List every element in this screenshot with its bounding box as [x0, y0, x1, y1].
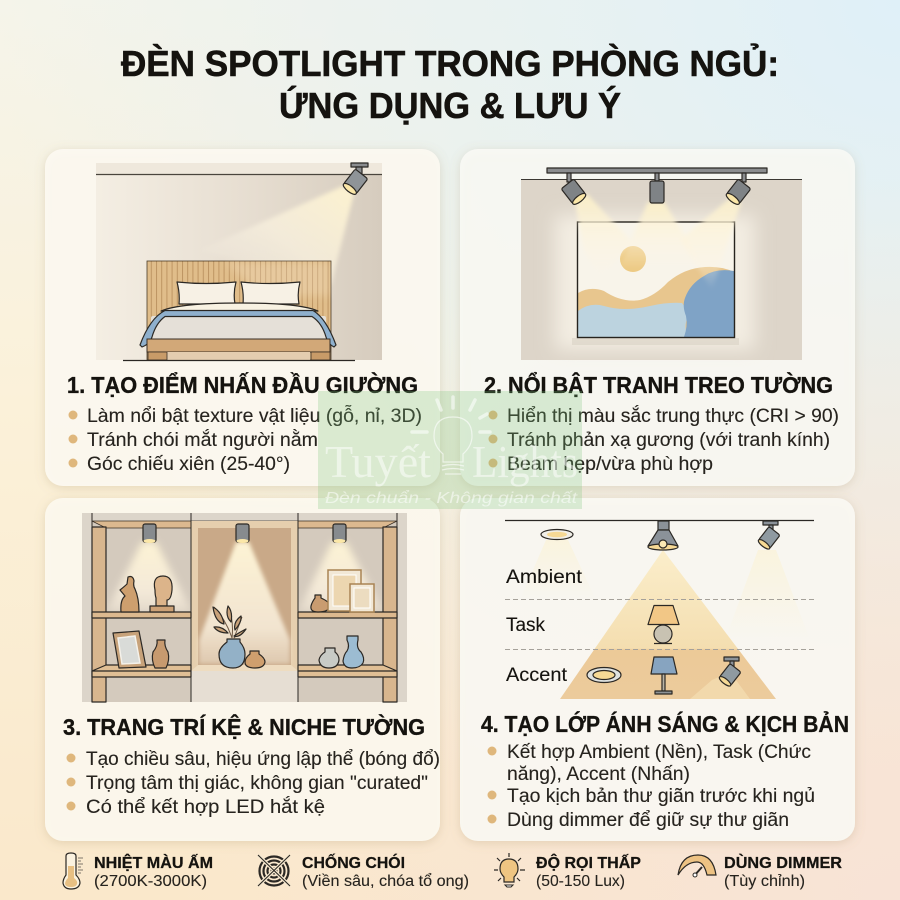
watermark: Tuyet Lights: Đèn chuẩn - Không gian chất	[325, 489, 578, 507]
artwork	[578, 222, 734, 338]
panel: light layers and scenes	[460, 498, 855, 841]
illustration: artwork with three spotlights	[521, 168, 802, 360]
icon: downlights	[143, 524, 346, 543]
bullet list: Tránh chói mắt người nằm	[87, 429, 318, 451]
label: task: Task	[506, 615, 545, 636]
bullet list: Kết hợp Ambient (Nền), Task (Chức	[507, 742, 811, 763]
icon: pendant light	[648, 521, 678, 550]
icon: accent spot	[718, 657, 741, 688]
icon: ceiling downlight	[541, 530, 573, 540]
bullet list: Beam hẹp/vừa phù hợp	[507, 454, 713, 475]
label: accent: Accent	[506, 665, 568, 686]
bullet list: Làm nổi bật texture vật liệu (gỗ, nỉ, 3D)	[87, 405, 422, 427]
title: ỨNG DỤNG & LƯU Ý	[279, 84, 621, 126]
bullet list	[488, 742, 815, 831]
bullet list: Có thể kết hợp LED hắt kệ	[86, 796, 325, 818]
footer: dimmer: DÙNG DIMMER	[724, 854, 842, 872]
right shelf decor	[311, 570, 374, 668]
icon: dimmer gauge	[678, 855, 716, 877]
icon: light bulb	[494, 853, 525, 887]
footer: low illuminance: (50-150 Lux)	[536, 873, 625, 890]
panel: headboard accent	[45, 149, 440, 486]
left shelf decor	[113, 576, 174, 668]
watermark: Tuyet Lights	[318, 391, 582, 509]
heading: 2. NỔI BẬT TRANH TREO TƯỜNG	[484, 371, 833, 398]
icon: track spot	[757, 521, 780, 551]
panel: shelves and niches	[45, 498, 440, 841]
centre niche decor	[213, 606, 265, 668]
footer: warm colour temperature	[63, 853, 213, 890]
heading: 4. TẠO LỚP ÁNH SÁNG & KỊCH BẢN	[481, 709, 849, 737]
icon: honeycomb crossed	[258, 855, 290, 886]
footer: anti-glare: (Viền sâu, chóa tổ ong)	[302, 873, 469, 890]
icon: three track spotlights	[561, 173, 751, 206]
diagram: ambient, task, accent layers	[505, 520, 814, 699]
illustration: shelving with downlights	[82, 513, 407, 702]
bullet list: năng), Accent (Nhấn)	[507, 764, 690, 785]
footer: anti-glare	[258, 854, 469, 890]
icon: track spotlight	[342, 163, 368, 196]
bullet list	[68, 405, 422, 475]
heading: 1. TẠO ĐIỂM NHẤN ĐẦU GIƯỜNG	[67, 371, 418, 398]
label: ambient: Ambient	[506, 567, 583, 588]
footer: warm colour temperature: NHIỆT MÀU ẤM	[94, 854, 213, 872]
footer: low illuminance	[494, 853, 641, 890]
bullet list: Góc chiếu xiên (25-40°)	[87, 454, 290, 475]
illustration: bed with spotlight	[96, 163, 382, 360]
watermark: Tuyet Lights: Lights	[472, 436, 578, 487]
icon: recessed light	[587, 668, 621, 682]
bullet list: Hiển thị màu sắc trung thực (CRI > 90)	[507, 405, 839, 427]
panel: wall art	[460, 149, 855, 486]
bullet list: Tạo chiều sâu, hiệu ứng lập thể (bóng đổ)	[86, 749, 440, 770]
footer: warm colour temperature: (2700K-3000K)	[94, 873, 207, 890]
footer: dimmer	[678, 854, 842, 890]
bullet list: Tạo kịch bản thư giãn trước khi ngủ	[507, 786, 815, 807]
icon: blue lamp	[651, 657, 677, 694]
title	[121, 42, 779, 126]
footer: anti-glare: CHỐNG CHÓI	[302, 854, 405, 872]
bullet list: Dùng dimmer để giữ sự thư giãn	[507, 810, 789, 831]
footer: low illuminance: ĐỘ RỌI THẤP	[536, 854, 641, 872]
bullet list	[66, 749, 440, 818]
bullet list: Tránh phản xạ gương (với tranh kính)	[507, 430, 830, 451]
title: ĐÈN SPOTLIGHT TRONG PHÒNG NGỦ:	[121, 42, 779, 84]
bullet list: Trọng tâm thị giác, không gian "curated"	[86, 773, 428, 794]
footer: dimmer: (Tùy chỉnh)	[724, 873, 805, 890]
watermark: Tuyet Lights: Tuyết	[325, 436, 431, 487]
icon: table lamp	[648, 606, 679, 644]
heading: 3. TRANG TRÍ KỆ & NICHE TƯỜNG	[63, 713, 425, 740]
bullet list	[488, 405, 839, 475]
icon: thermometer	[63, 853, 83, 889]
